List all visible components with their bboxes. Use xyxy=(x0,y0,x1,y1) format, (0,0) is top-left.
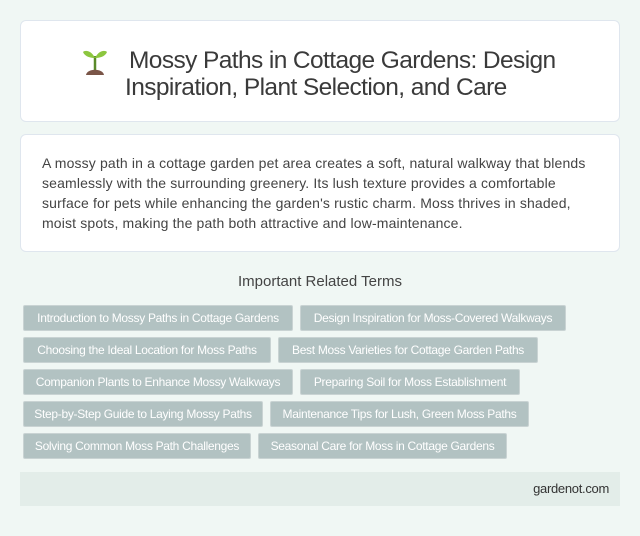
tag: Design Inspiration for Moss-Covered Walkways xyxy=(314,311,552,325)
header card xyxy=(20,20,620,122)
icon: seedling xyxy=(83,50,107,75)
tag: Preparing Soil for Moss Establishment xyxy=(314,375,506,389)
footer xyxy=(20,472,620,506)
tag xyxy=(300,305,566,331)
tag xyxy=(23,337,271,363)
tag: Maintenance Tips for Lush, Green Moss Paths xyxy=(283,407,516,421)
tag xyxy=(270,401,529,427)
title: Inspiration, Plant Selection, and Care xyxy=(125,74,507,101)
tag: Choosing the Ideal Location for Moss Paths xyxy=(37,343,257,357)
tag xyxy=(300,369,520,395)
tag: Step-by-Step Guide to Laying Mossy Paths xyxy=(34,407,252,421)
tag xyxy=(258,433,507,459)
tag xyxy=(23,305,293,331)
tag xyxy=(23,433,251,459)
description card xyxy=(20,134,620,252)
tag xyxy=(23,401,263,427)
description card: A mossy path in a cottage garden pet area creates a soft, natural walkway that blends xyxy=(42,155,586,171)
title: Mossy Paths in Cottage Gardens: Design xyxy=(129,47,556,74)
description card: moist spots, making the path both attractive and low-maintenance. xyxy=(42,215,463,231)
tag list xyxy=(23,305,566,459)
description card: surface for pets while enhancing the garden's rustic charm. Moss thrives in shaded, xyxy=(42,195,571,211)
tag xyxy=(23,369,293,395)
tag: Seasonal Care for Moss in Cottage Gardens xyxy=(271,439,494,453)
title xyxy=(125,47,556,101)
tag xyxy=(278,337,538,363)
section heading: Important Related Terms xyxy=(238,273,402,290)
tag: Introduction to Mossy Paths in Cottage Gardens xyxy=(37,311,279,325)
tag: Best Moss Varieties for Cottage Garden Paths xyxy=(292,343,524,357)
footer: gardenot.com xyxy=(533,481,609,496)
description card: seamlessly with the surrounding greenery. Its lush texture provides a comfortable xyxy=(42,175,556,191)
tag: Companion Plants to Enhance Mossy Walkways xyxy=(36,375,280,389)
tag: Solving Common Moss Path Challenges xyxy=(35,439,239,453)
